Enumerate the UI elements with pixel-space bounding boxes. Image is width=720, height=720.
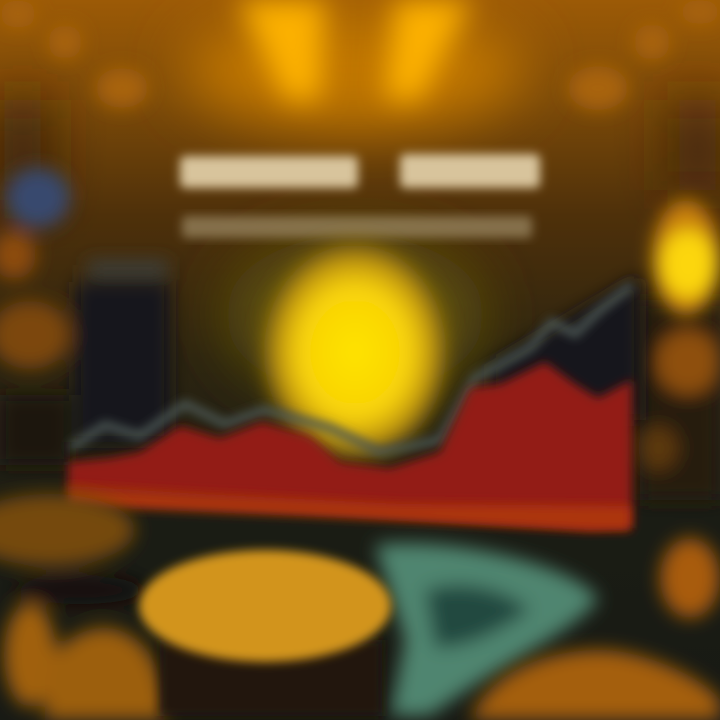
right side lights [638,300,720,618]
chart dark upper panel [490,275,640,420]
right glowing lamp [652,200,720,316]
chart line [70,285,632,452]
central sun [255,234,455,470]
left side panel [0,168,170,465]
orange area base [68,486,630,530]
ceiling light beams [238,0,472,100]
red area [68,362,632,530]
title [180,154,540,188]
subtitle [182,216,532,238]
decorative bokeh lights, top corners [0,0,720,110]
lower right bowl [470,650,720,720]
golden cup [139,550,391,716]
lower left coins [0,494,165,720]
area chart [68,275,640,530]
background glow: top light [0,10,720,395]
green swirl [375,543,598,716]
